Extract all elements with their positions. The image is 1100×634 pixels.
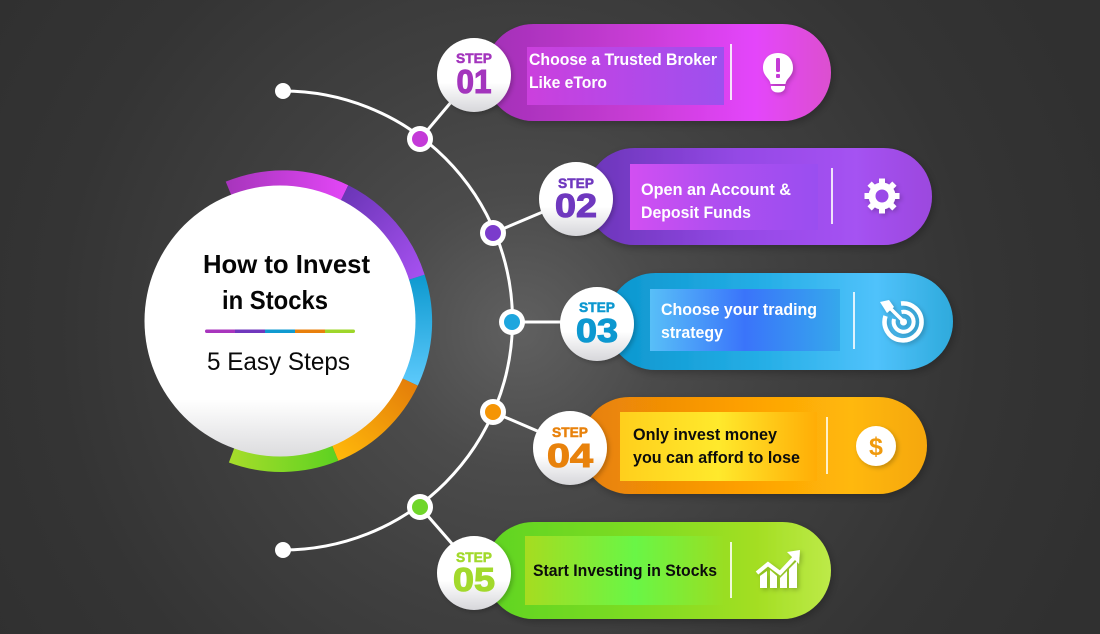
- step 2 pill: [586, 148, 932, 245]
- step 3 text: strategy: [661, 324, 724, 342]
- step 3 badge: STEP: [579, 299, 615, 315]
- step 5 badge: STEP: [456, 549, 492, 565]
- step 4 badge: [533, 411, 607, 485]
- step 2 badge: 02: [555, 187, 597, 224]
- node: step 4: [480, 399, 506, 425]
- step 3 badge: [560, 287, 634, 361]
- panel: step 2: [539, 148, 932, 245]
- timeline arc: [283, 91, 512, 550]
- step 1 badge: STEP: [456, 50, 492, 66]
- step 5 badge: 05: [453, 561, 495, 598]
- node: step 3: [499, 309, 525, 335]
- step 2 text: Deposit Funds: [641, 204, 751, 222]
- step 2 badge: STEP: [558, 175, 594, 191]
- step 4 badge: 04: [547, 437, 594, 474]
- arc end dot: bottom: [275, 542, 291, 558]
- panel: step 3: [560, 273, 953, 370]
- icon: light bulb: [763, 53, 793, 92]
- step 5 badge: [437, 536, 511, 610]
- step 5 text box: [525, 536, 725, 605]
- step 1 text: [529, 51, 718, 92]
- step 3 badge: 03: [576, 312, 618, 349]
- step 4 text box: [620, 412, 817, 481]
- step 4 badge: STEP: [552, 424, 588, 440]
- step 5 divider: [730, 542, 732, 598]
- step 4 text: Only invest money: [633, 426, 778, 444]
- step 4 pill: [581, 397, 927, 494]
- step 1 text: Like eToro: [529, 74, 607, 92]
- step 1 badge: 01: [456, 63, 492, 100]
- step 2 badge: [539, 162, 613, 236]
- step 4 text: [633, 426, 800, 467]
- step 2 text: Open an Account &: [641, 181, 791, 199]
- icon: growth chart: [757, 550, 800, 588]
- step 1 pill: [485, 24, 831, 121]
- icon: dollar coin: $: [869, 433, 883, 461]
- panel: step 1: [437, 24, 831, 121]
- step 3 text: Choose your trading: [661, 301, 817, 319]
- step 2 text box: [630, 164, 818, 230]
- step 1 divider: [730, 44, 732, 100]
- step 4 text: you can afford to lose: [633, 449, 800, 467]
- icon: target: [880, 300, 922, 340]
- panel: step 5: [437, 522, 831, 619]
- hub title: in Stocks: [222, 285, 328, 315]
- step 1 text: Choose a Trusted Broker: [529, 51, 718, 69]
- step 4 divider: [826, 417, 828, 474]
- icon: dollar coin: [856, 426, 896, 466]
- hub: segmented ring: [229, 180, 423, 462]
- hub underline: [205, 330, 355, 333]
- timeline connectors: [420, 101, 565, 546]
- step 3 pill: [607, 273, 953, 370]
- step 3 text box: [650, 289, 840, 351]
- step 1 badge: [437, 38, 511, 112]
- node: step 5: [407, 494, 433, 520]
- hub subtitle: 5 Easy Steps: [207, 348, 350, 376]
- node: step 1: [407, 126, 433, 152]
- step 5 text: Start Investing in Stocks: [533, 562, 717, 580]
- node: step 2: [480, 220, 506, 246]
- step 1 text box: [527, 47, 724, 105]
- step 3 divider: [853, 292, 855, 349]
- hub title: [203, 249, 370, 315]
- step 2 divider: [831, 168, 833, 224]
- panel: step 4: [533, 397, 927, 494]
- step 5 pill: [485, 522, 831, 619]
- step 2 text: [641, 181, 791, 222]
- step 3 text: [661, 301, 817, 342]
- hub: white circle: [144, 186, 416, 456]
- hub title: How to Invest: [203, 249, 370, 279]
- icon: gear: [864, 178, 900, 214]
- arc end dot: top: [275, 83, 291, 99]
